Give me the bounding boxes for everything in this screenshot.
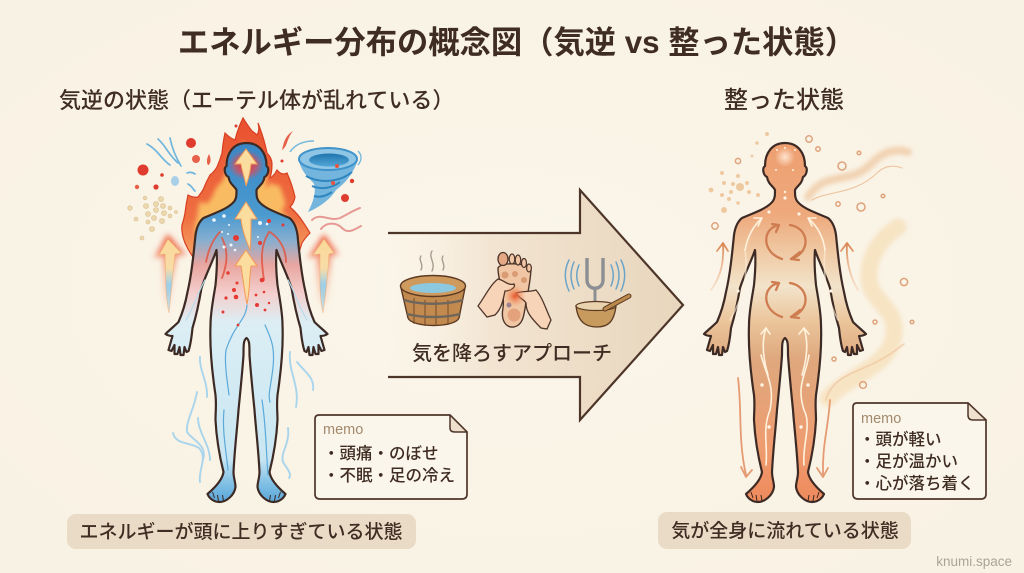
panel: disturbed figure [128, 118, 361, 502]
cold waves around legs [173, 352, 313, 482]
red wavy lines [312, 208, 361, 231]
outer arrows up [711, 243, 858, 290]
sand particle cluster [128, 196, 178, 240]
icon: wooden bucket with steam [400, 251, 466, 326]
credit: knumi.space [936, 554, 1012, 569]
arrow label: 気を降ろすアプローチ [412, 342, 612, 365]
icon: foot massage [478, 252, 551, 329]
memo: symptoms: memo [323, 422, 363, 438]
side arrow right [312, 238, 335, 313]
upward arrows in body [235, 149, 257, 304]
flames behind body [182, 118, 310, 257]
inner flow lines and veins [186, 280, 307, 475]
caption pill right [658, 512, 911, 549]
memo: benefits: ・心が落ち着く [859, 473, 974, 493]
memo: symptoms [315, 415, 467, 499]
arrow: approach [388, 190, 683, 420]
heading: left state: 気逆の状態（エーテル体が乱れている） [59, 88, 454, 113]
toes [751, 492, 819, 501]
body silhouette: blue and red [166, 143, 328, 502]
toes [212, 492, 280, 501]
heading: right state: 整った状態 [724, 87, 844, 114]
light dots [736, 147, 833, 429]
caption pill left [67, 514, 416, 549]
caption pill right: 気が全身に流れている状態 [671, 520, 899, 542]
body silhouette: warm [704, 143, 866, 502]
memo: benefits: ・足が温かい [859, 451, 958, 471]
memo: symptoms: ・頭痛・のぼせ [323, 444, 438, 463]
icon: blue wind lines [147, 138, 195, 191]
head heat [228, 150, 264, 180]
side arrow left [158, 238, 182, 313]
blue blob [171, 176, 179, 186]
red channels [206, 232, 286, 280]
circulating arrows upper [766, 224, 806, 260]
white flow arrows [730, 218, 838, 465]
panel: balanced figure [704, 132, 914, 502]
title: エネルギー分布の概念図（気逆 vs 整った状態） [178, 25, 856, 60]
memo: symptoms: ・不眠・足の冷え [323, 466, 455, 485]
memo: benefits [853, 403, 986, 499]
memo: benefits: ・頭が軽い [859, 429, 942, 449]
icon: tuning fork and singing bowl [565, 258, 629, 327]
memo: benefits: memo [861, 411, 901, 427]
red particles [135, 124, 354, 202]
head glow [775, 147, 795, 167]
warm particles [712, 136, 914, 388]
outer arrows down [738, 378, 830, 477]
warm speckle cluster [709, 132, 769, 213]
caption pill left: エネルギーが頭に上りすぎている状態 [79, 521, 403, 543]
circulating arrows lower [766, 282, 806, 318]
icon: tornado [290, 141, 361, 212]
flowing wisps [808, 151, 908, 400]
red and white dots [222, 219, 284, 326]
